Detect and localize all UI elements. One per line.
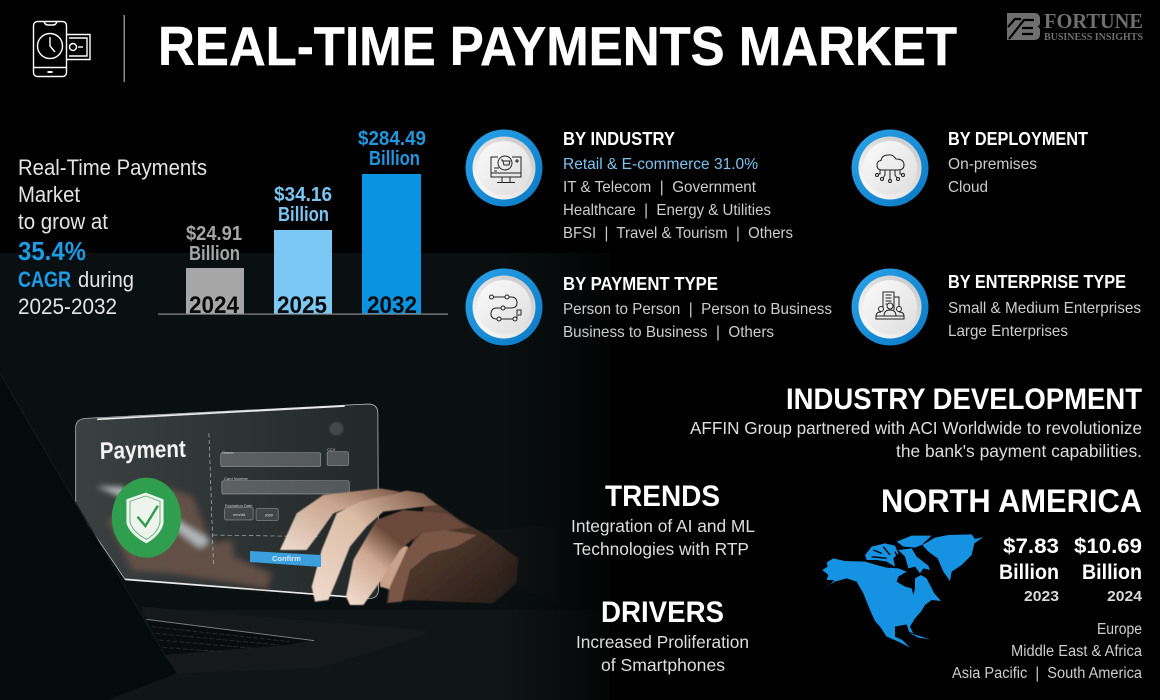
drivers: of Smartphones [601, 655, 725, 675]
drivers: Increased Proliferation [576, 632, 749, 652]
industry development [690, 383, 1142, 461]
bar chart: market size: 2032 [367, 292, 417, 319]
segment: by payment type: Person to Person | Person to Business [563, 301, 832, 318]
photo fade to black on right [500, 253, 610, 700]
confirm button [250, 551, 321, 567]
photo screen labels: Payment [99, 436, 186, 465]
CAGR text block: during [78, 267, 134, 292]
other regions: Europe [1097, 621, 1142, 638]
icon: by payment type [466, 268, 542, 346]
segment: by enterprise type [948, 272, 1141, 340]
map: north america [820, 534, 983, 648]
photo screen labels: yyyy [265, 512, 273, 517]
icon: by industry [466, 130, 542, 206]
segment: by payment type: Business to Business | Others [563, 324, 774, 341]
bar chart: market size: $24.91 [186, 223, 242, 245]
header icon: phone with clock and cash [34, 22, 90, 76]
photo screen labels: Expiration Date [225, 503, 253, 508]
bar chart: market size [158, 128, 448, 319]
photo screen labels: Card Number [224, 476, 249, 481]
icon: by enterprise type [852, 268, 928, 346]
sleeve [485, 525, 560, 605]
trends [571, 480, 755, 559]
segment: by industry: BFSI | Travel & Tourism | Others [563, 225, 793, 242]
segment: by enterprise type: Small & Medium Enterprises [948, 300, 1141, 317]
segment: by deployment [948, 129, 1088, 196]
segment: by industry [563, 129, 793, 242]
CAGR text block [18, 155, 207, 319]
segment: by payment type: BY PAYMENT TYPE [563, 274, 718, 294]
other regions [952, 621, 1142, 682]
hand [280, 488, 518, 605]
drivers: DRIVERS [601, 596, 724, 629]
segment: by payment type [563, 274, 832, 341]
north america values: $10.69 [1074, 535, 1142, 558]
north america heading: NORTH AMERICA [881, 483, 1142, 519]
bar chart: market size: $34.16 [274, 184, 332, 206]
photo screen labels: Confirm [272, 554, 301, 563]
segment: by industry: Healthcare | Energy & Utilities [563, 202, 771, 219]
segment: by industry: Retail & E-commerce 31.0% [563, 156, 758, 173]
segment: by industry: BY INDUSTRY [563, 129, 675, 149]
title: REAL-TIME PAYMENTS MARKET [158, 15, 957, 77]
north america values: Billion [1082, 561, 1142, 584]
bar chart: market size: Billion [189, 243, 240, 265]
photo: hand using a transparent payment screen over a laptop [0, 253, 610, 700]
segment: by enterprise type: Large Enterprises [948, 323, 1068, 340]
photo screen labels: CCV [327, 447, 336, 452]
shield badge [112, 478, 181, 558]
segment: by industry: IT & Telecom | Government [563, 179, 757, 196]
bar chart: market size: 2025 [277, 292, 327, 319]
logo: Fortune Business Insights: BUSINESS INSIGHTS [1044, 32, 1143, 43]
segment: by deployment: Cloud [948, 179, 988, 196]
north america values [999, 535, 1143, 605]
north america values: 2023 [1024, 588, 1059, 605]
glass panel [76, 404, 379, 598]
north america values: 2024 [1107, 588, 1143, 605]
drivers [576, 596, 749, 675]
bar chart: market size: Billion [369, 148, 420, 170]
CAGR text block: to grow at [18, 209, 108, 234]
industry development: the bank's payment capabilities. [896, 441, 1142, 461]
CAGR text block: 2025-2032 [18, 294, 117, 319]
photo screen labels [99, 436, 336, 563]
CAGR text block: Real-Time Payments [18, 155, 207, 180]
CAGR text block: 35.4% [18, 236, 86, 266]
north america values: Billion [999, 561, 1059, 584]
CAGR text block: CAGR [18, 267, 71, 292]
segment: by deployment: On-premises [948, 156, 1037, 173]
bar chart: market size: 2024 [189, 292, 240, 319]
segment: by enterprise type: BY ENTERPRISE TYPE [948, 272, 1126, 292]
trends: Technologies with RTP [573, 539, 749, 559]
photo screen labels: Owner [222, 450, 234, 455]
logo: Fortune Business Insights [1007, 9, 1143, 43]
segment: by deployment: BY DEPLOYMENT [948, 129, 1088, 149]
other regions: Middle East & Africa [1011, 643, 1142, 660]
photo screen labels: mm/dd [233, 512, 245, 517]
bar chart: market size: $284.49 [358, 128, 426, 150]
other regions: Asia Pacific | South America [952, 665, 1142, 682]
CAGR text block: Market [18, 182, 80, 207]
header divider [124, 15, 125, 82]
icon: by deployment [852, 130, 928, 206]
trends: Integration of AI and ML [571, 516, 755, 536]
logo: Fortune Business Insights: FORTUNE [1044, 9, 1143, 33]
bar chart: market size: Billion [278, 204, 329, 226]
north america values: $7.83 [1003, 535, 1059, 558]
trends: TRENDS [605, 480, 720, 513]
laptop [0, 373, 425, 700]
industry development: AFFIN Group partnered with ACI Worldwide to revolutionize [690, 418, 1142, 438]
